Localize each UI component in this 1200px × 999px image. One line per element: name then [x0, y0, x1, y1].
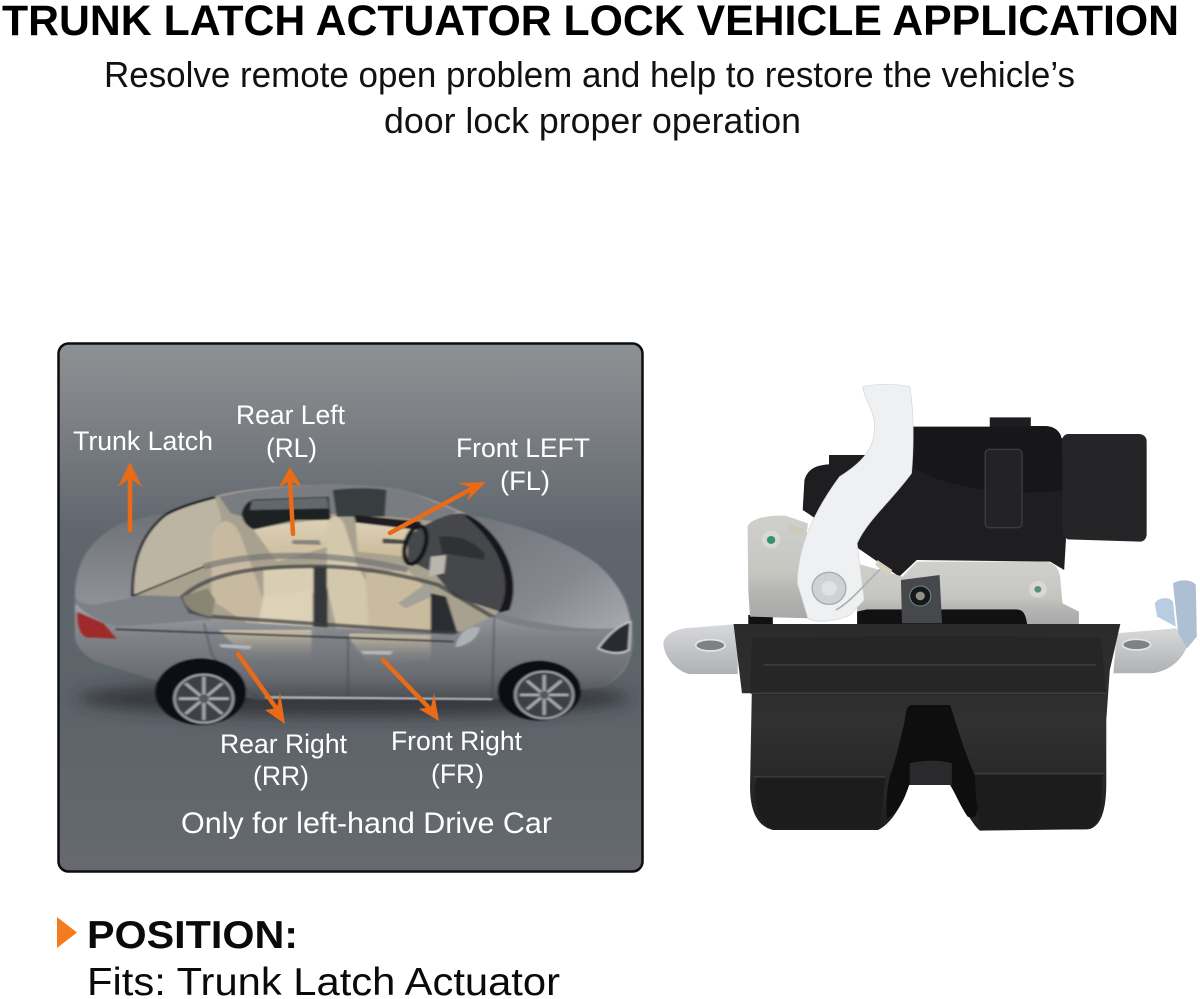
door handles	[219, 644, 252, 649]
seats	[212, 521, 312, 630]
hood	[462, 513, 631, 629]
arrow: rear left	[279, 467, 302, 534]
housing recess	[985, 449, 1022, 528]
panel: vehicle door positions	[58, 344, 642, 872]
latch slot	[886, 705, 978, 818]
panel labels: Rear Right	[220, 729, 347, 759]
headlight	[598, 622, 631, 653]
actuator housing	[803, 417, 1066, 577]
side mirror	[456, 627, 480, 647]
subtitle	[104, 54, 1075, 141]
position heading: POSITION:	[87, 914, 298, 957]
panel labels: (FR)	[431, 759, 484, 789]
pivot rivet	[812, 572, 846, 604]
cabin base	[133, 485, 506, 635]
near window frame	[183, 566, 492, 635]
black strip behind plate	[748, 609, 1027, 625]
section: position	[57, 914, 560, 999]
panel labels: (RL)	[266, 433, 317, 463]
lower door transparent seats	[219, 630, 312, 663]
roof strip	[219, 485, 458, 522]
car illustration	[75, 485, 633, 725]
latch body	[734, 624, 1120, 831]
dashboard	[408, 513, 506, 612]
rear wheel	[155, 658, 246, 725]
panel labels: Trunk Latch	[73, 426, 213, 456]
rear window	[133, 498, 221, 595]
metal plate	[748, 516, 808, 618]
panel labels: Front Right	[391, 726, 522, 756]
panel labels: (RR)	[253, 761, 309, 791]
spring	[836, 567, 883, 610]
panel labels	[73, 400, 590, 840]
subtitle: door lock proper operation	[384, 100, 801, 141]
tab and bolt	[901, 575, 942, 623]
screws	[762, 531, 780, 548]
white release lever	[797, 384, 913, 621]
mounting tab left	[663, 624, 738, 674]
arrow: rear right	[238, 654, 285, 724]
trunk lid	[75, 514, 165, 605]
far door interior	[254, 520, 329, 562]
icon: orange triangle marker	[57, 917, 77, 948]
panel labels: Only for left-hand Drive Car	[181, 807, 552, 840]
subtitle: Resolve remote open problem and help to restore the vehicle’s	[104, 54, 1075, 95]
tail light	[77, 612, 117, 639]
panel labels: (FL)	[500, 466, 550, 496]
panel labels: Front LEFT	[456, 433, 590, 463]
mounting tab right	[1113, 628, 1187, 673]
product: trunk latch actuator	[663, 384, 1197, 831]
arrow: front right	[383, 660, 439, 721]
connector	[1062, 434, 1147, 542]
arrow: front left	[390, 482, 486, 533]
arrow: trunk latch	[118, 462, 142, 530]
sunroof	[333, 488, 387, 517]
car silhouette	[75, 485, 633, 699]
front wheel	[498, 661, 581, 721]
panel labels: Rear Left	[236, 400, 345, 430]
side panel	[75, 603, 631, 699]
far rear window	[242, 497, 331, 529]
sill	[265, 697, 492, 699]
